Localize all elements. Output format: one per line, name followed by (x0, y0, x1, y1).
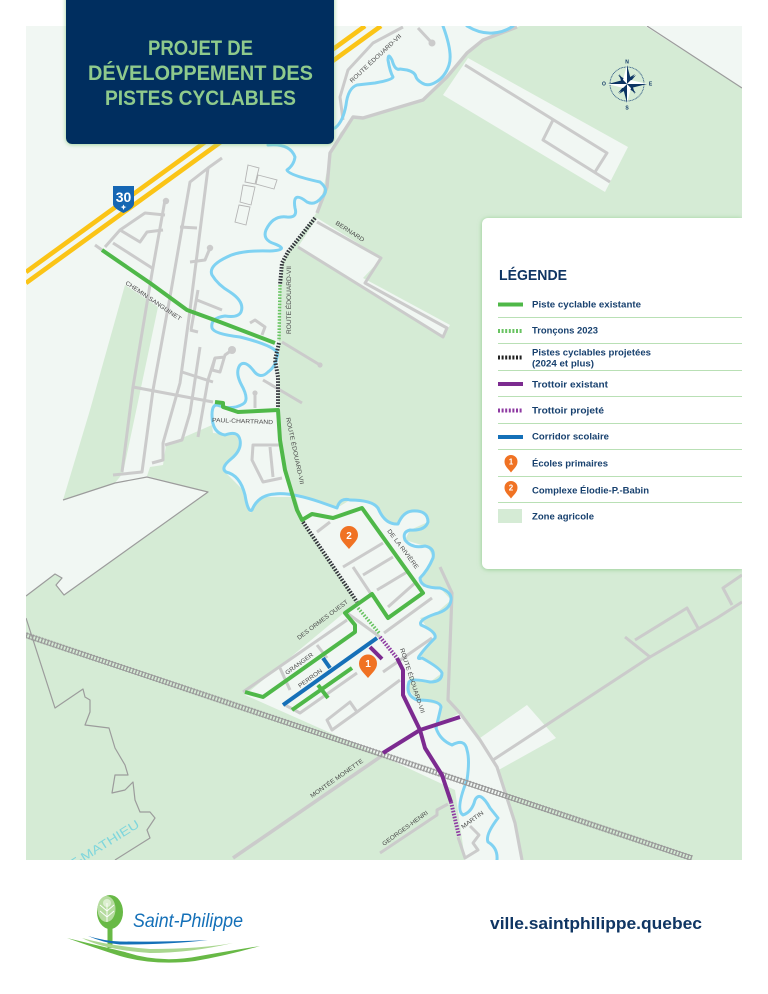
boundary lines (26, 26, 742, 860)
website URL: ville.saintphilippe.quebec (490, 914, 702, 933)
urban area (26, 26, 522, 860)
legend item: Elodie-P.-Babin complex (504, 481, 649, 498)
icon: highway 30 shield (113, 186, 134, 213)
map pin 1 (359, 654, 377, 678)
existing bike paths (102, 250, 423, 710)
street end caps (163, 40, 436, 396)
title line 3: PISTES CYCLABLES (105, 87, 296, 110)
icon: compass rose: O (602, 82, 606, 88)
railway (26, 633, 692, 860)
buildings (235, 165, 277, 225)
street labels: CHEMIN SANGUINET (124, 281, 182, 323)
panel: legend (482, 210, 752, 578)
legend item: 2023 sections: Tronçons 2023 (532, 326, 598, 336)
street labels: ROUTE ÉDOUARD-VII (286, 266, 293, 334)
legend item: 2023 sections (498, 326, 598, 336)
legend item: agricultural zone: Zone agricole (532, 512, 594, 522)
legend item: school corridor: Corridor scolaire (532, 432, 609, 442)
title line 1: PROJET DE (148, 37, 253, 60)
legend item: Elodie-P.-Babin complex: 2 (509, 484, 514, 492)
light strips (298, 26, 742, 772)
label: watercourse Saint-Mathieu: ST-MATHIEU (58, 817, 142, 877)
map pin 2: 2 (346, 531, 352, 542)
legend item: projected bike paths: (2024 et plus) (532, 358, 594, 370)
street labels: GEORGES-HENRI (382, 810, 430, 848)
street labels: ROUTE ÉDOUARD-VII (349, 33, 403, 84)
agricultural zone background (26, 26, 742, 860)
2023 sections (279, 285, 380, 634)
map (26, 26, 742, 877)
legend item: existing sidewalk: Trottoir existant (532, 380, 609, 390)
street labels: PERRON (298, 668, 324, 690)
icon: compass rose: S (625, 106, 629, 112)
street network (95, 27, 742, 860)
legend item: Elodie-P.-Babin complex: Complexe Élodie-P.-Babin (532, 486, 649, 496)
legend item: primary schools: 1 (509, 458, 514, 466)
icon: highway 30 shield: 30 (116, 189, 131, 205)
icon: compass rose: N (625, 60, 629, 66)
legend item: primary schools (504, 455, 608, 472)
legend item: projected bike paths (498, 348, 651, 370)
legend item: projected sidewalk (498, 406, 604, 416)
legend item: primary schools: Écoles primaires (532, 458, 608, 470)
projected sidewalks (380, 637, 459, 836)
highway 30 (26, 26, 381, 283)
logo wordmark: Saint-Philippe (133, 911, 243, 932)
agricultural wedge (63, 285, 158, 500)
street labels (124, 33, 485, 848)
street labels: BERNARD (334, 221, 365, 244)
legend item: projected bike paths: Pistes cyclables projetées (532, 348, 651, 358)
street labels: MONTÉE MONETTE (309, 758, 365, 800)
street labels: MARTIN (461, 810, 485, 831)
map pin 2 (340, 526, 358, 549)
icon: compass rose: E (649, 82, 653, 88)
street labels: PAUL-CHARTRAND (212, 418, 274, 426)
legend item: agricultural zone (498, 509, 594, 523)
icon: compass rose (602, 60, 653, 112)
title panel (66, 0, 334, 144)
legend item: school corridor (498, 432, 609, 442)
legend item: existing sidewalk (498, 380, 609, 390)
school corridor (283, 638, 377, 705)
street labels: DE LA RIVIÈRE (385, 528, 420, 571)
legend item: existing bike path: Piste cyclable existante (532, 300, 641, 310)
street labels: DES ORMES OUEST (297, 599, 350, 642)
street labels: ROUTE ÉDOUARD-VII (284, 417, 305, 485)
logo: Saint-Philippe (67, 895, 260, 963)
street labels: ROUTE ÉDOUARD-VII (398, 647, 426, 715)
map pin 1: 1 (365, 659, 371, 670)
legend heading: LÉGENDE (499, 267, 567, 284)
projected bike paths (275, 218, 357, 602)
river (211, 26, 513, 860)
title line 2: DÉVELOPPEMENT DES (88, 62, 313, 85)
legend item: projected sidewalk: Trottoir projeté (532, 406, 604, 416)
existing sidewalks (370, 647, 460, 802)
street labels: GRANGER (285, 652, 315, 677)
